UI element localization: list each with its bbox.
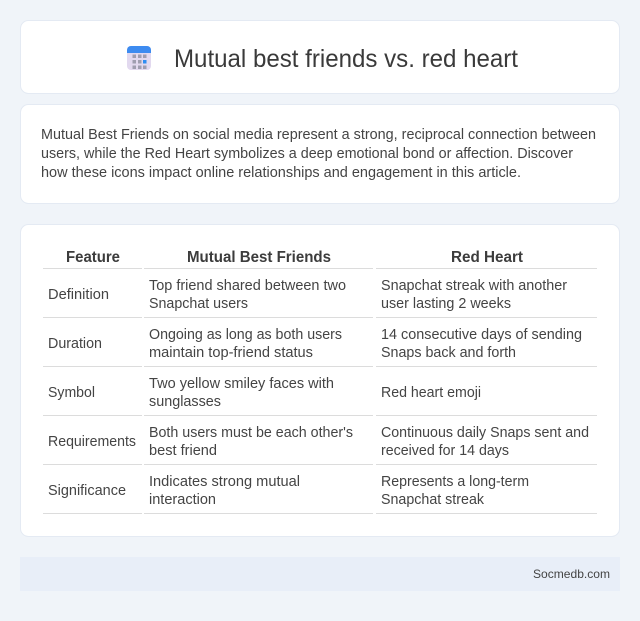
row: definition: Snapchat users [149, 296, 248, 312]
row: symbol: Red heart emoji [381, 385, 481, 401]
row: symbol: Two yellow smiley faces with [149, 376, 334, 392]
row: definition: Snapchat streak with another [381, 278, 567, 294]
intro text: Mutual Best Friends on social media represent a strong, reciprocal connection between [41, 127, 596, 143]
table header: Feature [66, 249, 120, 266]
icon: calendar [127, 46, 151, 70]
row: duration: Snaps back and forth [381, 345, 516, 361]
row: requirements: Continuous daily Snaps sent and [381, 425, 589, 441]
row: requirements: best friend [149, 443, 217, 459]
panel: intro [20, 104, 620, 204]
title text: Mutual best friends vs. red heart [174, 45, 518, 73]
row: significance [48, 474, 529, 508]
row: requirements: Requirements [48, 434, 136, 450]
row: definition [48, 278, 567, 312]
row: duration: maintain top-friend status [149, 345, 313, 361]
footer text: Socmedb.com [533, 567, 610, 581]
row: definition: Top friend shared between two [149, 278, 346, 294]
row: significance: Significance [48, 483, 126, 499]
row: symbol [48, 376, 481, 410]
row: significance: interaction [149, 492, 216, 508]
footer [20, 557, 620, 591]
table header: Red Heart [451, 249, 524, 266]
row: requirements [48, 425, 589, 459]
panel: comparison table [20, 224, 620, 536]
row: significance: Represents a long-term [381, 474, 529, 490]
row: duration [48, 327, 582, 361]
row: definition: user lasting 2 weeks [381, 296, 511, 312]
row: duration: Duration [48, 336, 102, 352]
row: requirements: Both users must be each other's [149, 425, 353, 441]
intro text: how these icons impact online relationships and engagement in this article. [41, 165, 521, 181]
panel: title [20, 20, 620, 94]
table header [66, 249, 524, 266]
row: significance: Snapchat streak [381, 492, 485, 508]
row: significance: Indicates strong mutual [149, 474, 300, 490]
row: duration: 14 consecutive days of sending [381, 327, 582, 343]
intro text: users, while the Red Heart symbolizes a deep emotional bond or affection. Discover [41, 146, 573, 162]
row: symbol: sunglasses [149, 394, 221, 410]
row: symbol: Symbol [48, 385, 95, 401]
table header: Mutual Best Friends [187, 249, 331, 266]
row: definition: Definition [48, 287, 109, 303]
row: duration: Ongoing as long as both users [149, 327, 342, 343]
row: requirements: received for 14 days [381, 443, 509, 459]
intro text [41, 127, 596, 181]
